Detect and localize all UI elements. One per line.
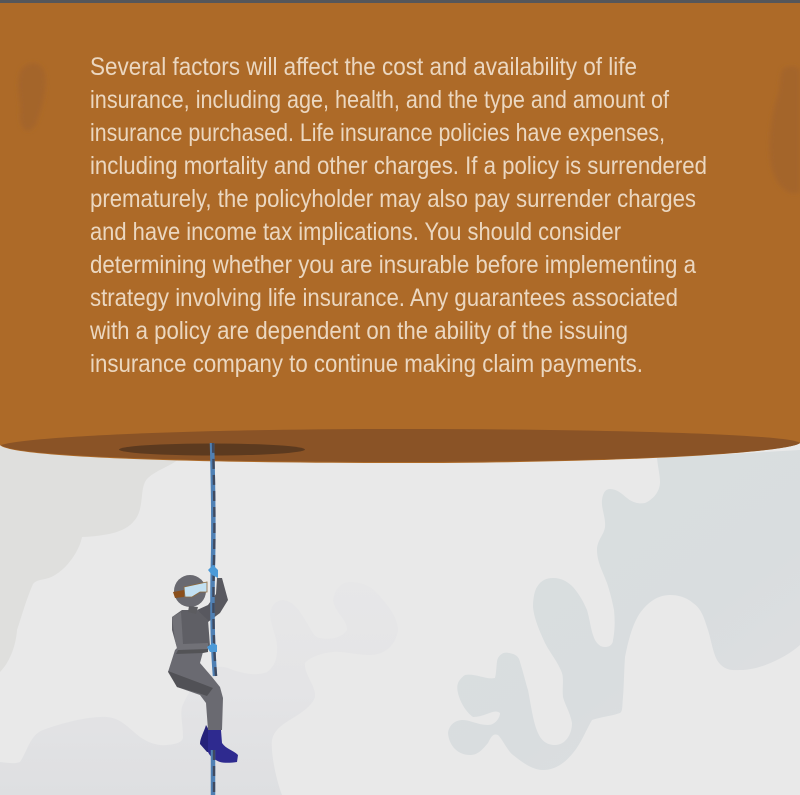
smoke cloud: top left [0,445,180,672]
scuff: right [770,66,800,193]
goggles strap [173,590,184,598]
upper glove [208,565,218,578]
torso upper [172,610,210,648]
ceiling fill [0,3,800,463]
body text [89,53,707,378]
raised arm [197,578,228,622]
front boot [208,730,238,763]
body text: insurance company to continue making claim payments. [90,350,643,378]
body text: insurance, including age, health, and the type and amount of [90,86,669,114]
scuff: left [18,63,45,131]
body text: prematurely, the policyholder may also pay surrender charges [90,185,696,213]
body text: insurance purchased. Life insurance policies have expenses, [90,119,665,147]
climber figure [168,575,238,763]
arm shadow [176,649,208,654]
hole shadow [119,444,305,456]
rope [212,443,216,795]
body text: including mortality and other charges. If a policy is surrendered [90,152,707,180]
goggles lens [184,582,207,597]
body text: determining whether you are insurable before implementing a [90,251,696,279]
head [174,575,206,607]
body lower [168,646,223,730]
body text: and have income tax implications. You should consider [90,218,621,246]
thigh shadow [168,671,213,696]
opening ellipse [1,429,800,462]
back boot [200,725,212,752]
top edge strip [0,0,800,3]
body text: strategy involving life insurance. Any guarantees associated [90,284,678,312]
front arm [172,612,208,652]
smoke cloud: lower left and centre fog [0,582,398,795]
neck [188,606,198,614]
body text: Several factors will affect the cost and availability of life [90,53,637,81]
body text: with a policy are dependent on the ability of the issuing [89,317,628,345]
brown ceiling panel [0,0,800,463]
smoke cloud: right [448,450,800,770]
lower glove [207,643,217,652]
